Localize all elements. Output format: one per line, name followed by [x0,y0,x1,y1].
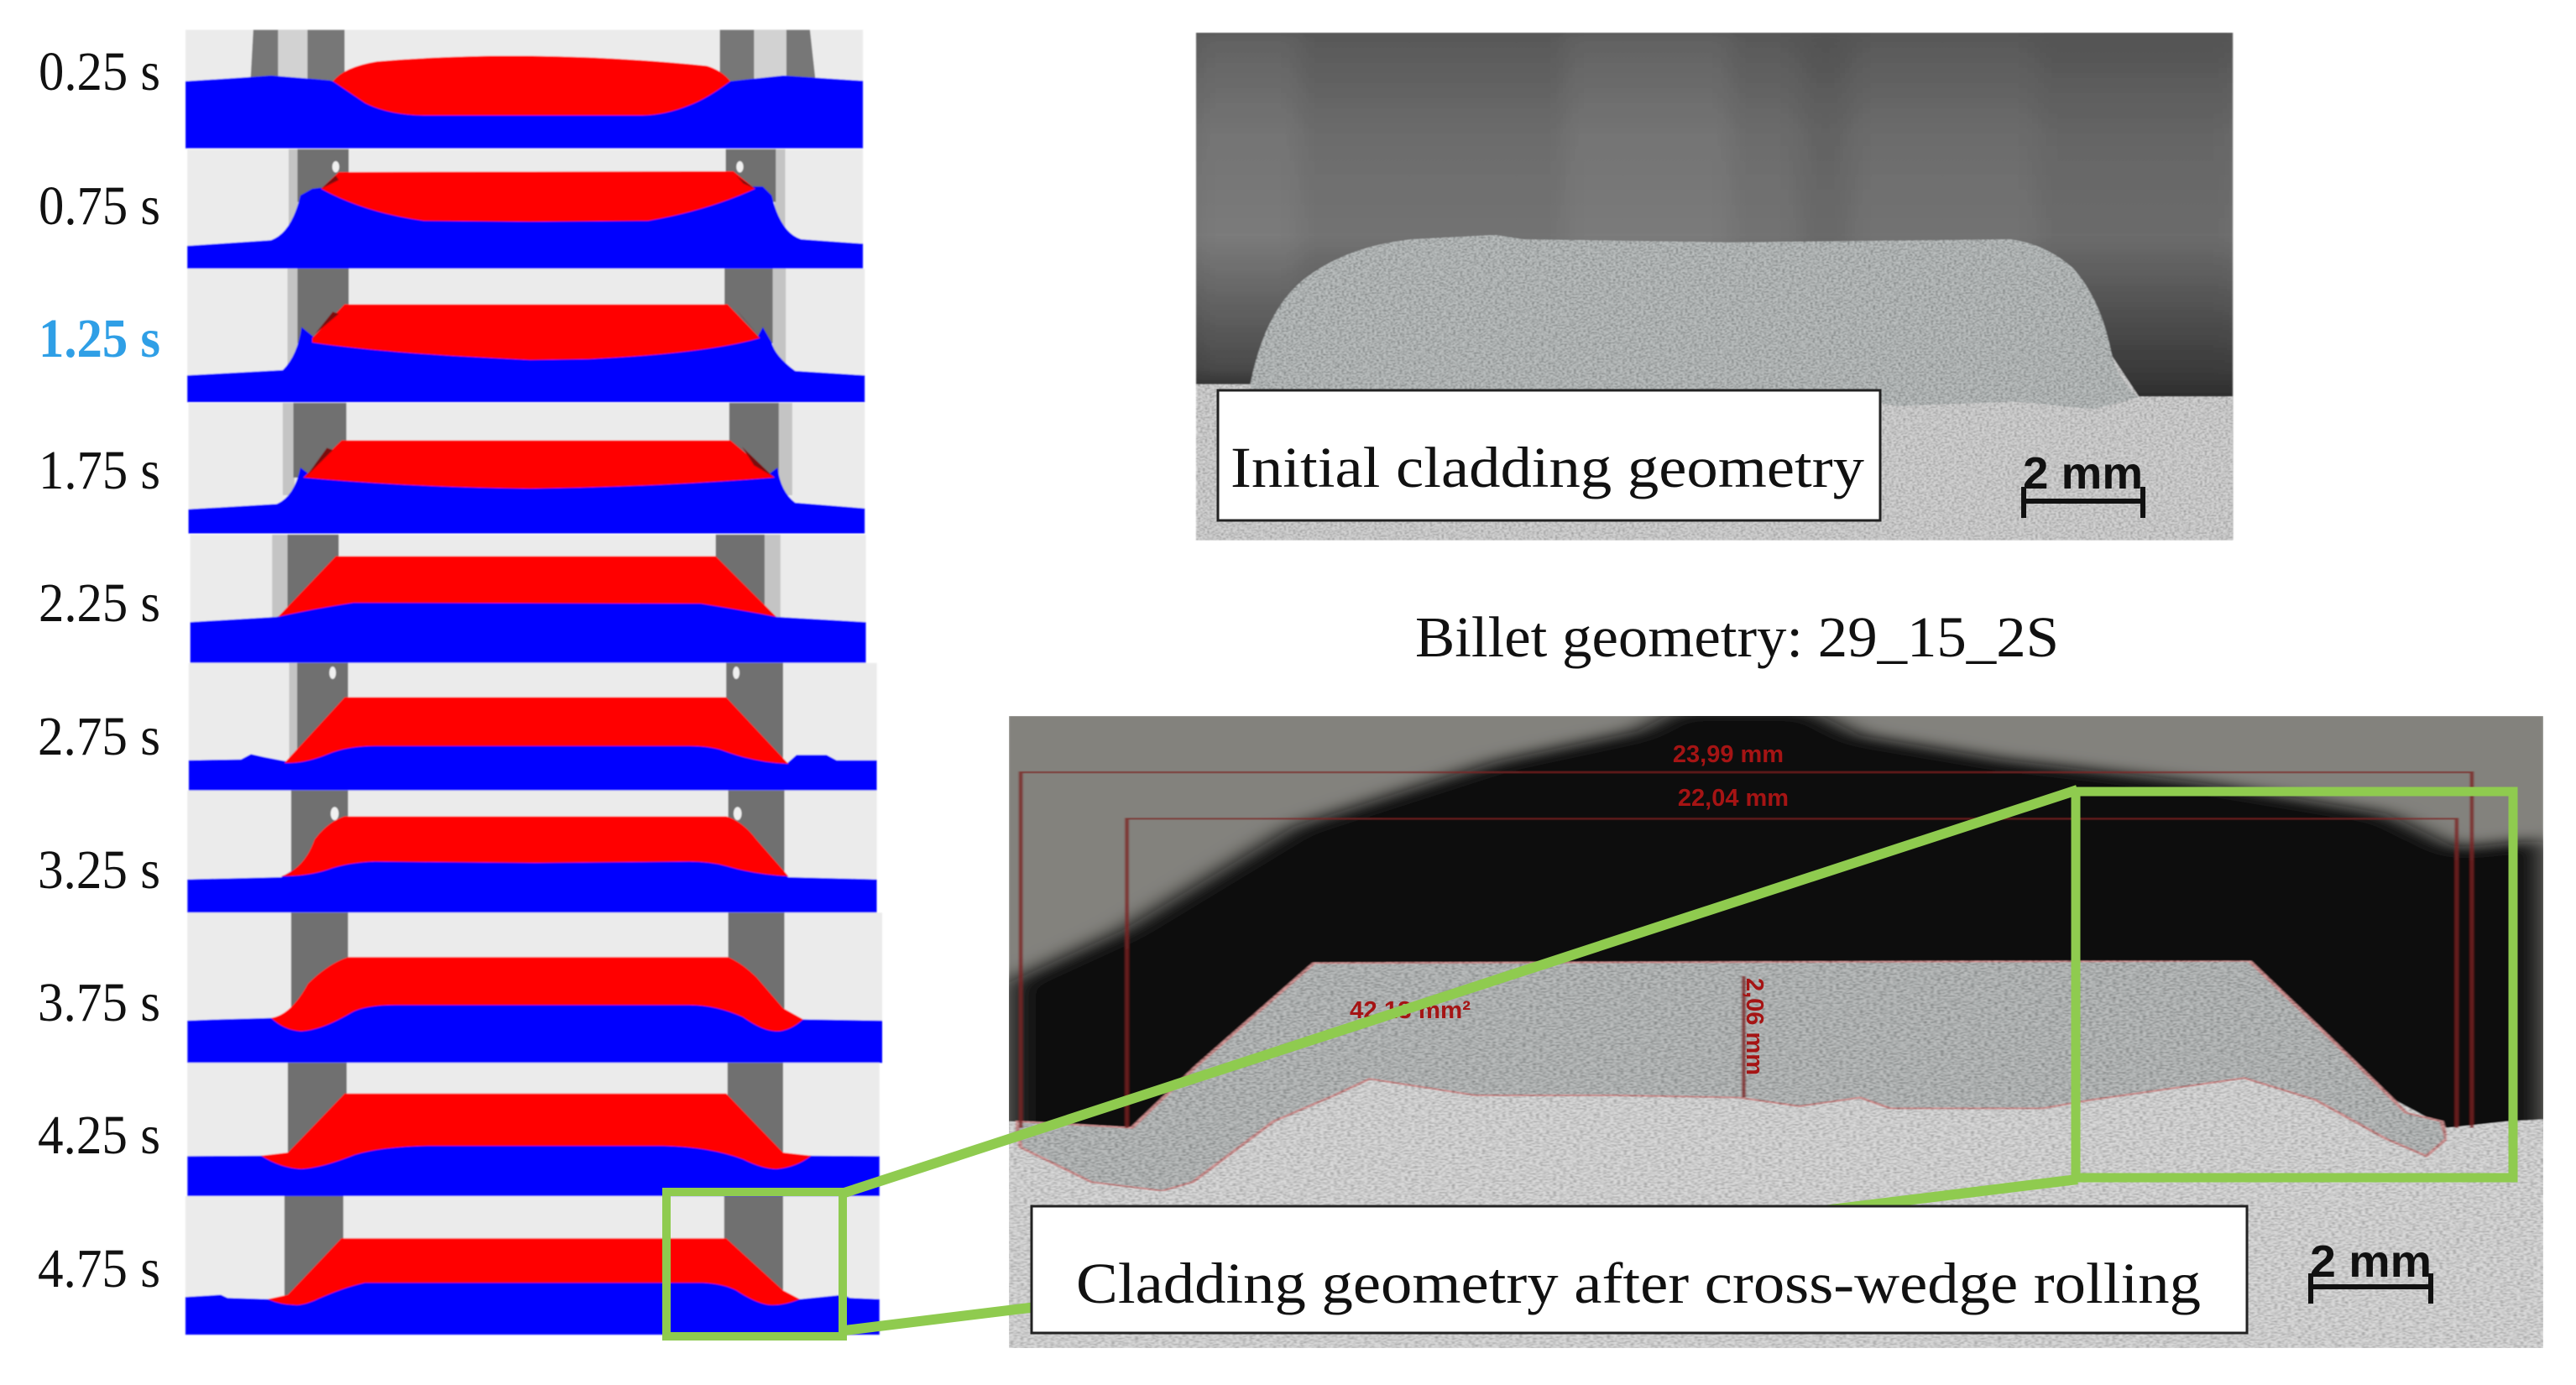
frame: 2.75 s [189,663,877,791]
time labels: 1.25 s [39,308,160,369]
label: initial cladding geometry: Initial cladding geometry [1231,436,1865,499]
time labels [38,41,160,1299]
time labels: 4.25 s [38,1105,160,1166]
frame: 4.75 s [185,1196,880,1335]
scale bar: 2 mm (after rolling): 2 mm [2310,1236,2432,1287]
frame: 3.25 s [187,791,877,912]
time labels: 0.75 s [39,175,160,237]
frame: 0.75 s [187,149,863,269]
scale bar: 2 mm (initial): 2 mm [2023,448,2143,499]
measurement annotations: 22,04 mm [1678,785,1789,812]
label: cladding geometry after rolling [1032,1206,2247,1333]
time labels: 0.25 s [39,41,160,102]
frame: 3.75 s [187,912,882,1063]
frame: 1.75 s [189,403,865,533]
time labels: 3.75 s [38,972,160,1033]
frame: 2.25 s [191,535,866,663]
time labels: 2.75 s [38,706,160,767]
panel: simulation time series [185,30,882,1335]
simulation frames 2.75 s to 4.75 s [185,663,882,1335]
photo backdrop [1009,716,2543,1121]
callout: zoom connector lines [844,790,2077,1330]
measurement annotations: 42,13 mm² [1350,997,1471,1024]
measurement annotations [1350,741,1789,1075]
measurement annotations: 23,99 mm [1673,741,1784,768]
frame: 4.25 s [187,1063,880,1196]
time labels: 2.25 s [39,572,160,634]
photo: initial cladding micrograph [1196,33,2233,540]
photo: cladding micrograph after rolling [1009,709,2543,1348]
dark cavity [1009,709,2543,1139]
callout: region box on simulation [666,1192,843,1336]
cladding layer [1016,961,2447,1191]
measurement annotations: 2,06 mm [1741,978,1768,1075]
label: cladding geometry after rolling: Cladding geometry after cross-wedge rolling [1076,1252,2201,1315]
measurement frames [1021,772,2472,1128]
caption: billet geometry: Billet geometry: 29_15_2S [1415,605,2059,669]
simulation frames 0.25 s to 2.25 s [185,30,866,663]
time labels: 1.75 s [39,440,160,501]
frame: 1.25 s [187,269,865,402]
label: initial cladding geometry [1218,390,1880,520]
frame: 0.25 s [185,30,863,149]
time labels: 3.25 s [38,839,160,901]
callout: region box on micrograph [2076,792,2513,1178]
time labels: 4.75 s [38,1238,160,1299]
substrate [1009,1052,2543,1348]
